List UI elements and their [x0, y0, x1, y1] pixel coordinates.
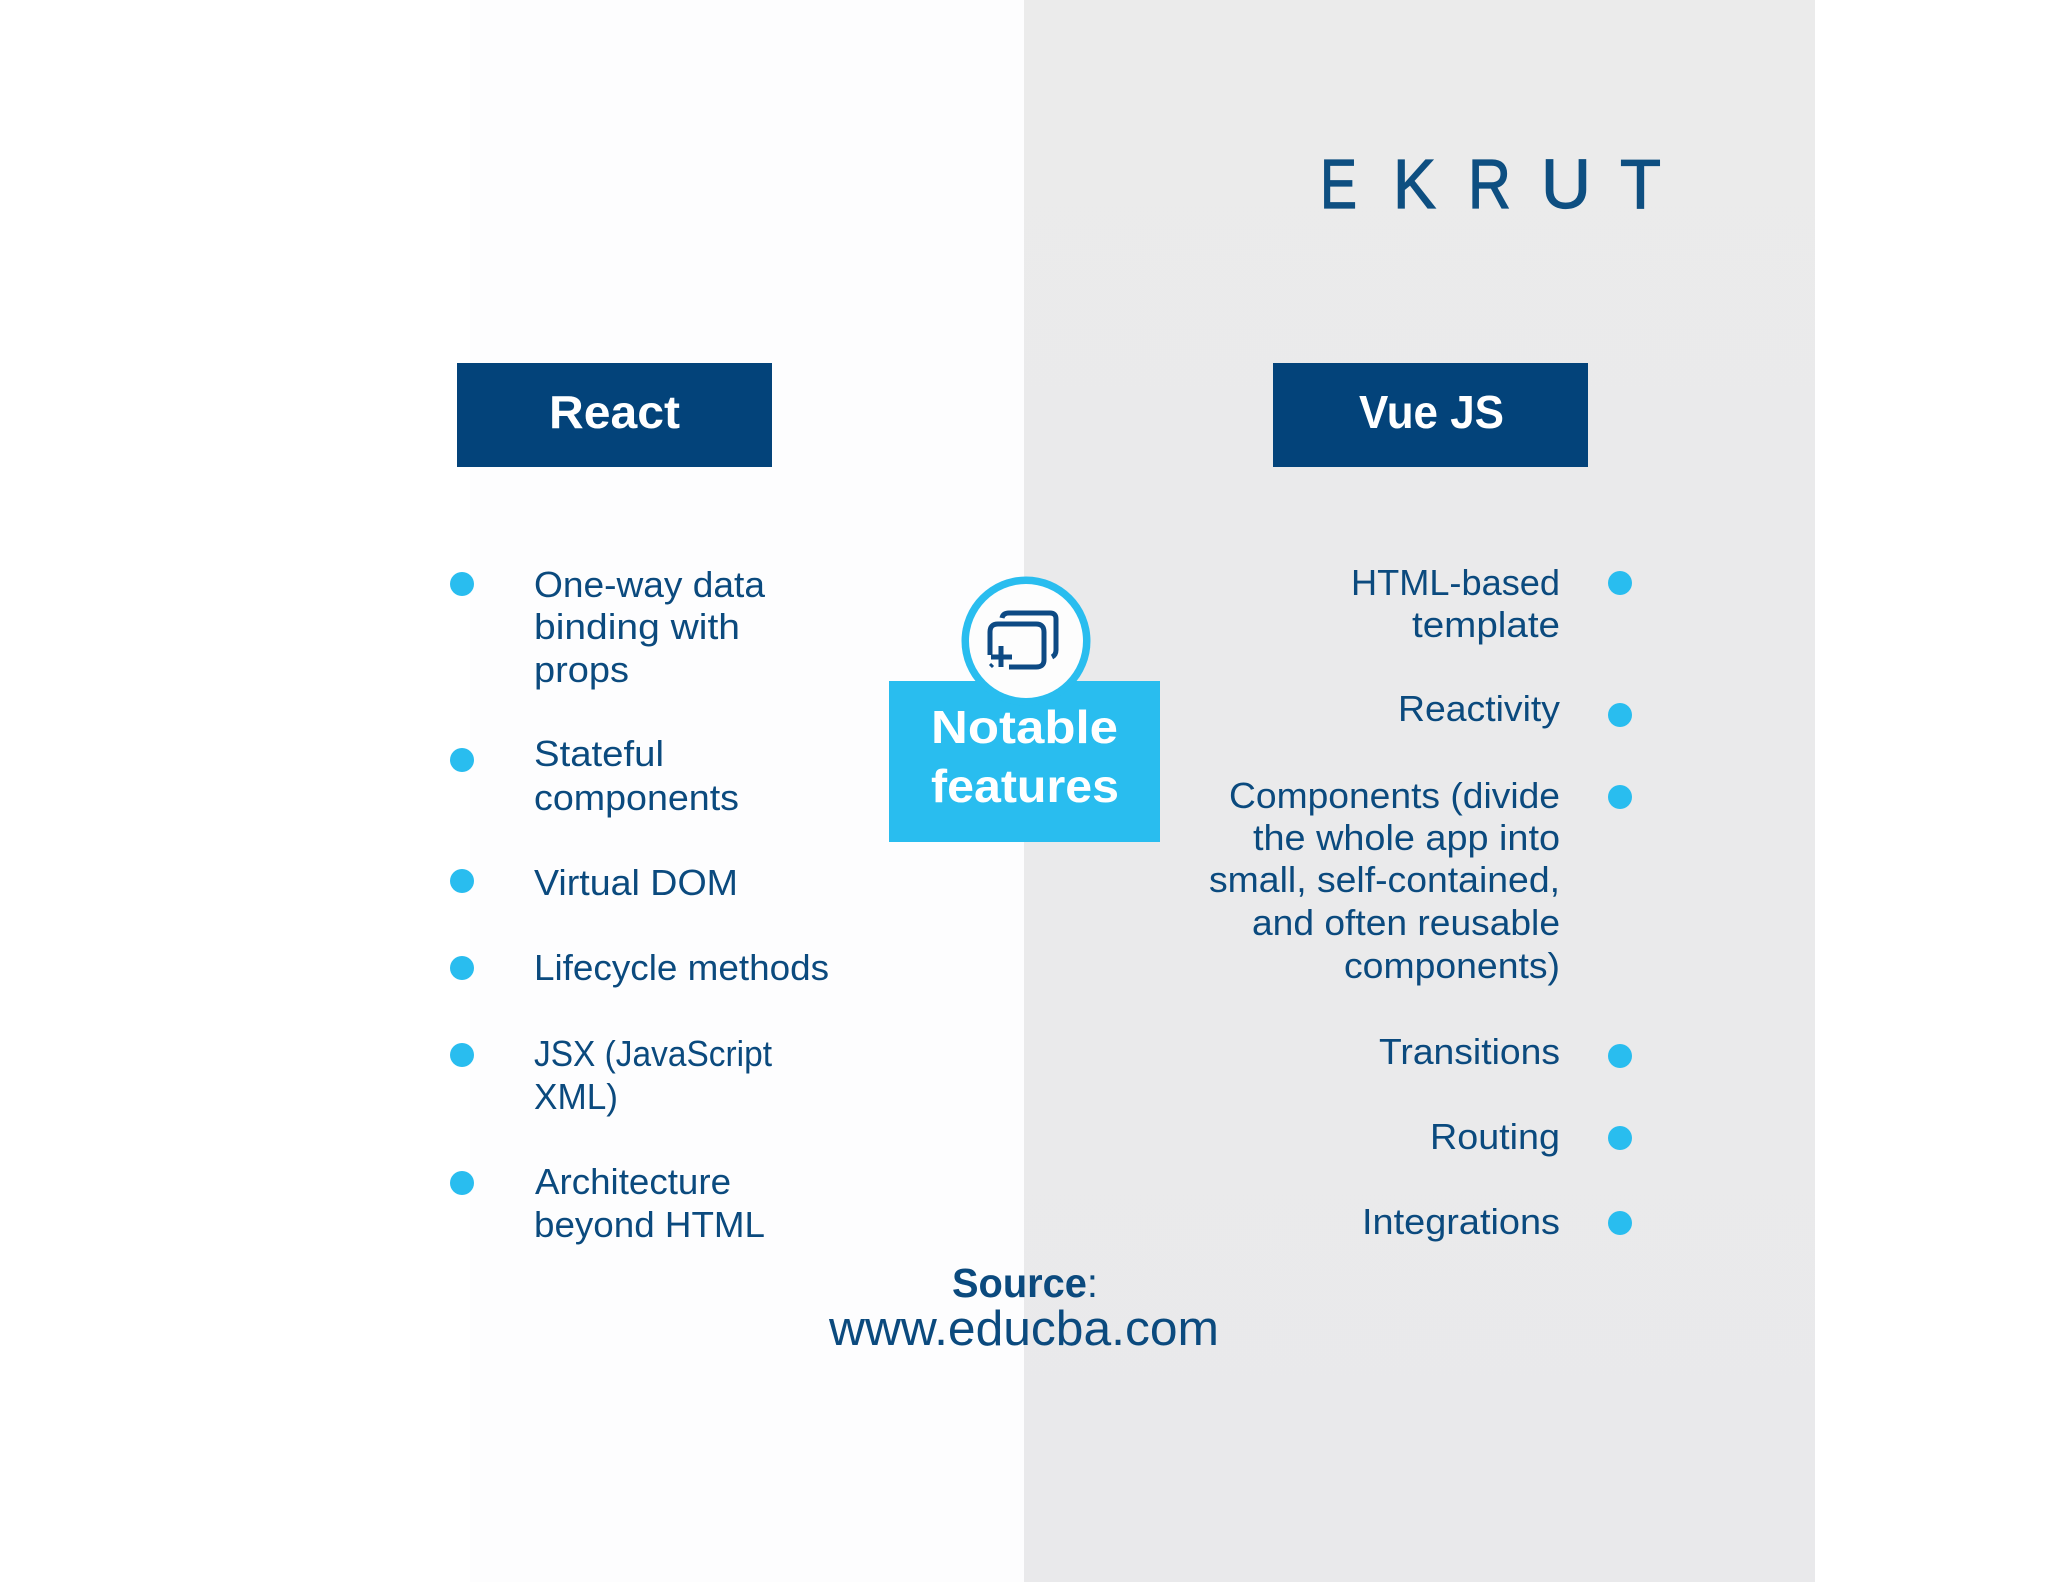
- item: JSX: XML): [534, 1076, 618, 1117]
- badge label: [931, 701, 1119, 812]
- centre badge: Notable features: [889, 576, 1160, 842]
- panel: right grey column: [1024, 0, 1815, 1582]
- item: Architecture beyond HTML: beyond HTML: [534, 1204, 765, 1245]
- heading: Vue JS: [1273, 363, 1588, 467]
- item: Architecture beyond HTML: [450, 1161, 765, 1245]
- logo: EKRUT: [1320, 145, 1661, 223]
- item: Transitions: Transitions: [1379, 1031, 1560, 1072]
- icon: stacked windows with plus: [990, 613, 1056, 667]
- item: One-way data binding: [450, 564, 766, 690]
- badge box: [889, 681, 1160, 842]
- logo: EKRUT: E: [1320, 145, 1357, 223]
- item: One-way data binding: One-way data: [534, 564, 766, 605]
- badge label: features: [931, 760, 1119, 812]
- logo: EKRUT: U: [1541, 145, 1591, 223]
- logo: EKRUT: R: [1468, 145, 1511, 223]
- item: Components: and often reusable: [1252, 902, 1560, 943]
- heading: Vue JS: Vue JS: [1359, 386, 1504, 438]
- item: Components: components): [1344, 945, 1560, 986]
- item: Reactivity: Reactivity: [1398, 688, 1560, 729]
- item: Virtual DOM: [450, 862, 738, 903]
- item: JSX: JSX (JavaScript: [534, 1033, 772, 1074]
- item: HTML-based template: HTML-based: [1351, 562, 1560, 603]
- logo: EKRUT: K: [1393, 145, 1436, 223]
- logo: EKRUT: T: [1620, 145, 1661, 223]
- item: Reactivity: [1398, 688, 1632, 729]
- source credit: Source:: [952, 1260, 1098, 1306]
- list: Vue JS features: [1209, 562, 1632, 1242]
- item: One-way data binding: props: [534, 649, 629, 690]
- item: Routing: [1430, 1116, 1632, 1157]
- item: Components: the whole app into: [1253, 817, 1560, 858]
- item: HTML-based template: [1351, 562, 1632, 645]
- icon ring: [962, 576, 1090, 706]
- heading: React: React: [549, 386, 680, 438]
- item: HTML-based template: template: [1412, 604, 1560, 645]
- heading: React: [457, 363, 772, 467]
- item: Stateful components: [450, 733, 739, 818]
- item: Virtual DOM: Virtual DOM: [534, 862, 738, 903]
- item: Stateful components: Stateful: [534, 733, 664, 774]
- panel: left background: [470, 0, 1024, 1582]
- item: Routing: Routing: [1430, 1116, 1560, 1157]
- item: Components: Components (divide: [1229, 775, 1560, 816]
- source credit: [828, 1260, 1219, 1356]
- item: Components: [1209, 775, 1632, 986]
- item: Integrations: [1362, 1201, 1632, 1242]
- badge label: Notable: [931, 701, 1118, 753]
- item: Integrations: Integrations: [1362, 1201, 1560, 1242]
- item: Stateful components: components: [534, 777, 739, 818]
- item: Components: small, self-contained,: [1209, 859, 1560, 900]
- source credit: www.educba.com: [828, 1302, 1219, 1356]
- list: React features: [450, 564, 829, 1245]
- item: JSX: [450, 1033, 772, 1117]
- item: Architecture beyond HTML: Architecture: [535, 1161, 731, 1202]
- item: One-way data binding: binding with: [534, 606, 740, 647]
- item: Lifecycle methods: Lifecycle methods: [534, 947, 829, 988]
- item: Transitions: [1379, 1031, 1632, 1072]
